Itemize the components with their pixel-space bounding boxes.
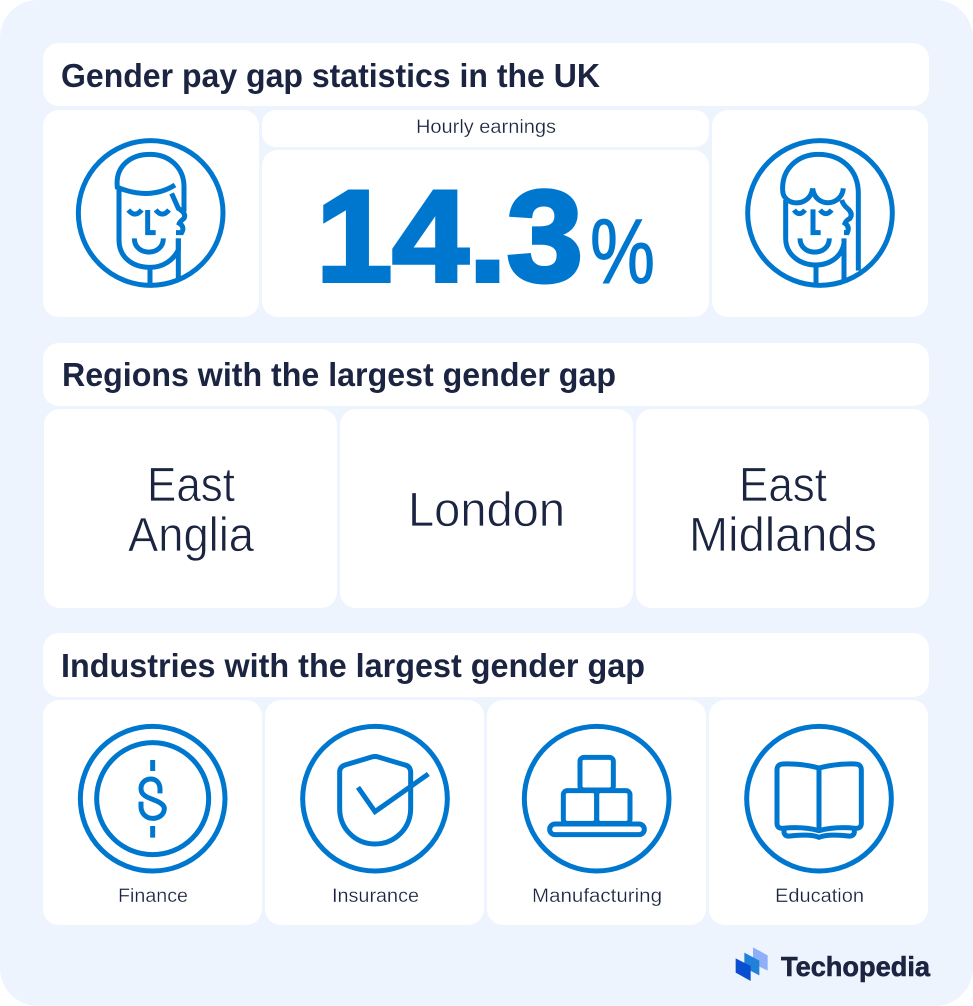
panel: East Midlands: East <box>739 459 827 512</box>
logo: Techopedia <box>736 947 930 982</box>
panel: East Midlands <box>636 409 929 608</box>
panel: East Midlands: Midlands <box>689 509 877 562</box>
panel: education <box>709 700 928 925</box>
panel: man portrait <box>43 110 259 317</box>
heading: gender pay gap statistics: Gender pay gap statistics in the UK <box>61 57 600 94</box>
panel: hourly earnings label: Hourly earnings <box>416 117 556 138</box>
panel: East Anglia: East <box>147 459 235 512</box>
heading: regions <box>43 343 929 406</box>
panel: education: Education <box>775 886 864 907</box>
panel: woman portrait <box>712 110 928 317</box>
panel: insurance <box>265 700 484 925</box>
heading: gender pay gap statistics <box>43 43 929 106</box>
panel: 14.3 percent statistic <box>262 150 709 317</box>
heading: industries: Industries with the largest gender gap <box>61 647 645 684</box>
panel: London <box>340 409 633 608</box>
panel: 14.3 percent statistic: % <box>590 201 655 303</box>
panel: manufacturing: Manufacturing <box>532 886 662 907</box>
panel: East Anglia <box>44 409 337 608</box>
panel: finance <box>43 700 262 925</box>
heading: regions: Regions with the largest gender gap <box>62 356 616 393</box>
panel: East Anglia: Anglia <box>128 509 254 562</box>
panel: 14.3 percent statistic: 14.3 <box>316 163 583 309</box>
panel: manufacturing <box>487 700 706 925</box>
logo: Techopedia: Techopedia <box>781 951 930 982</box>
panel: finance: Finance <box>118 886 188 907</box>
panel: insurance: Insurance <box>332 886 419 907</box>
panel: hourly earnings label <box>262 110 709 147</box>
panel: London: London <box>408 484 565 537</box>
heading: industries <box>43 633 929 697</box>
